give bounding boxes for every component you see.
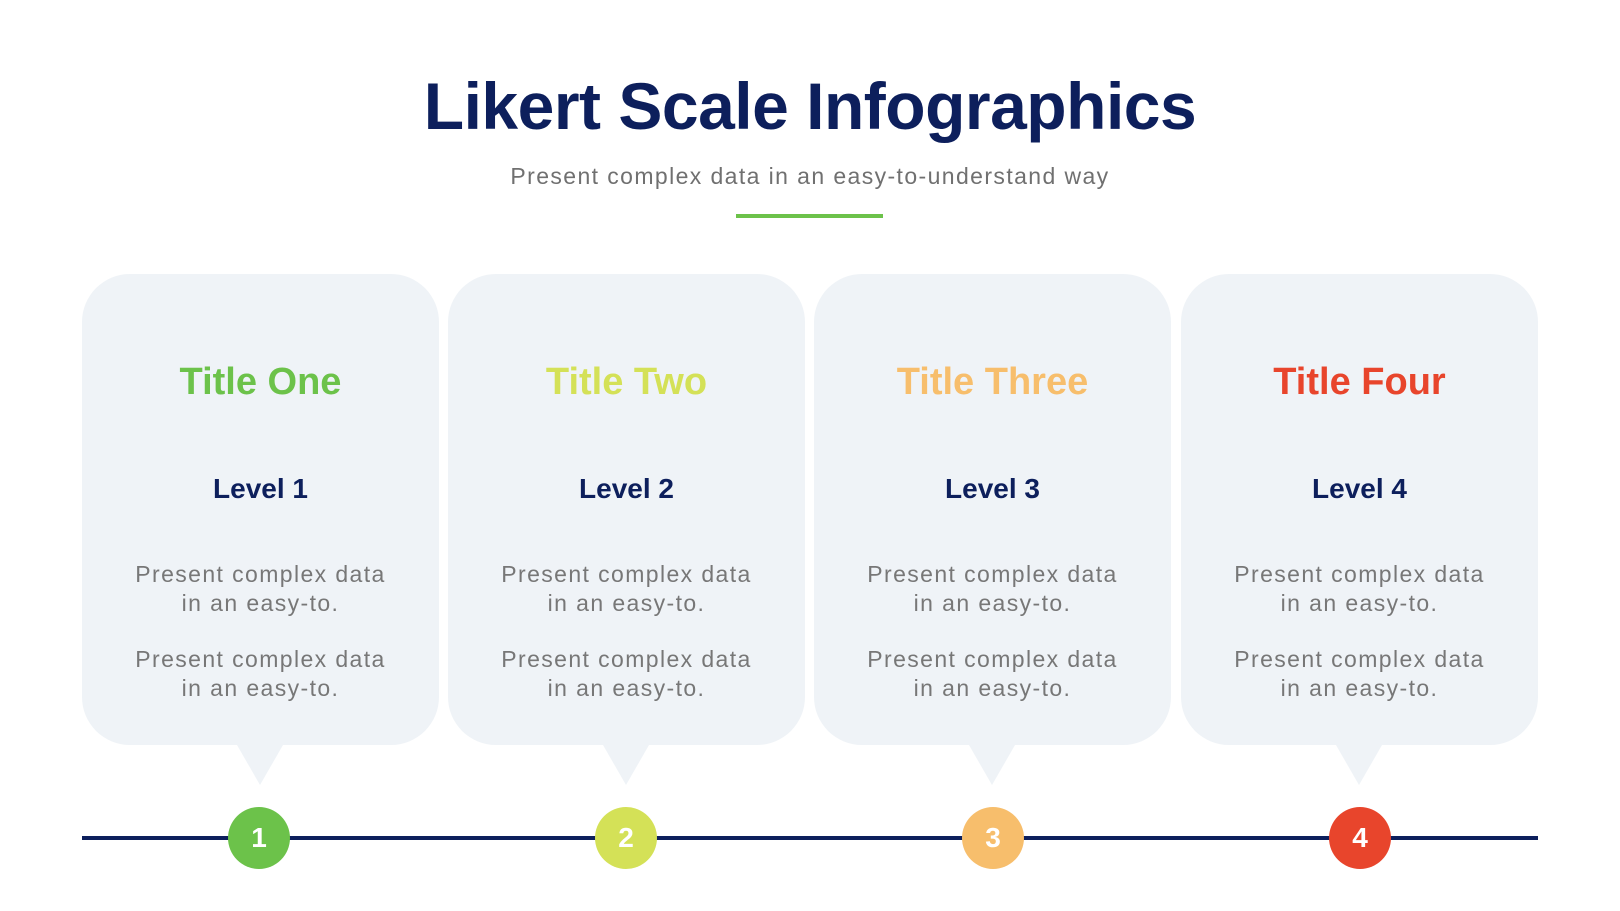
card 1 title: Title One bbox=[180, 361, 341, 403]
card 1 text: Present complex data bbox=[135, 561, 386, 587]
card 2 level: Level 2 bbox=[579, 473, 674, 504]
marker 4: 4 bbox=[1352, 822, 1368, 853]
card 4 text: in an easy-to. bbox=[1281, 675, 1438, 701]
panel: card 3 bbox=[814, 274, 1171, 745]
card 3 text: Present complex data bbox=[867, 561, 1118, 587]
card 2 text: in an easy-to. bbox=[548, 590, 705, 616]
card 1 text bbox=[135, 561, 386, 701]
card 4 text: in an easy-to. bbox=[1281, 590, 1438, 616]
card 4 text bbox=[1234, 561, 1485, 701]
card 4 text: Present complex data bbox=[1234, 561, 1485, 587]
card 4 text: Present complex data bbox=[1234, 646, 1485, 672]
card 1 level: Level 1 bbox=[213, 473, 308, 504]
card 3 text: in an easy-to. bbox=[914, 590, 1071, 616]
card 2 text bbox=[501, 561, 752, 701]
panel: card 1 bbox=[82, 274, 439, 745]
card 1 text: in an easy-to. bbox=[182, 675, 339, 701]
title: Likert Scale Infographics bbox=[424, 69, 1196, 143]
card 4 title: Title Four bbox=[1273, 361, 1446, 403]
panel: card 4 bbox=[1181, 274, 1538, 745]
card 2 text: Present complex data bbox=[501, 646, 752, 672]
marker 3 bbox=[962, 807, 1024, 869]
card 4 level: Level 4 bbox=[1312, 473, 1407, 504]
card 1 text: in an easy-to. bbox=[182, 590, 339, 616]
marker 2 bbox=[595, 807, 657, 869]
accent underline bbox=[736, 214, 883, 218]
marker 3: 3 bbox=[985, 822, 1001, 853]
card 2 text: Present complex data bbox=[501, 561, 752, 587]
card 3 title: Title Three bbox=[897, 361, 1088, 403]
marker 2: 2 bbox=[618, 822, 634, 853]
card 1 text: Present complex data bbox=[135, 646, 386, 672]
card 3 text bbox=[867, 561, 1118, 701]
timeline line bbox=[82, 836, 1538, 840]
marker 1 bbox=[228, 807, 290, 869]
subtitle: Present complex data in an easy-to-understand way bbox=[510, 163, 1110, 189]
card 3 text: in an easy-to. bbox=[914, 675, 1071, 701]
marker 1: 1 bbox=[251, 822, 267, 853]
panel: card 2 bbox=[448, 274, 805, 745]
card 2 title: Title Two bbox=[546, 361, 707, 403]
card 2 text: in an easy-to. bbox=[548, 675, 705, 701]
marker 4 bbox=[1329, 807, 1391, 869]
card 3 level: Level 3 bbox=[945, 473, 1040, 504]
card 3 text: Present complex data bbox=[867, 646, 1118, 672]
